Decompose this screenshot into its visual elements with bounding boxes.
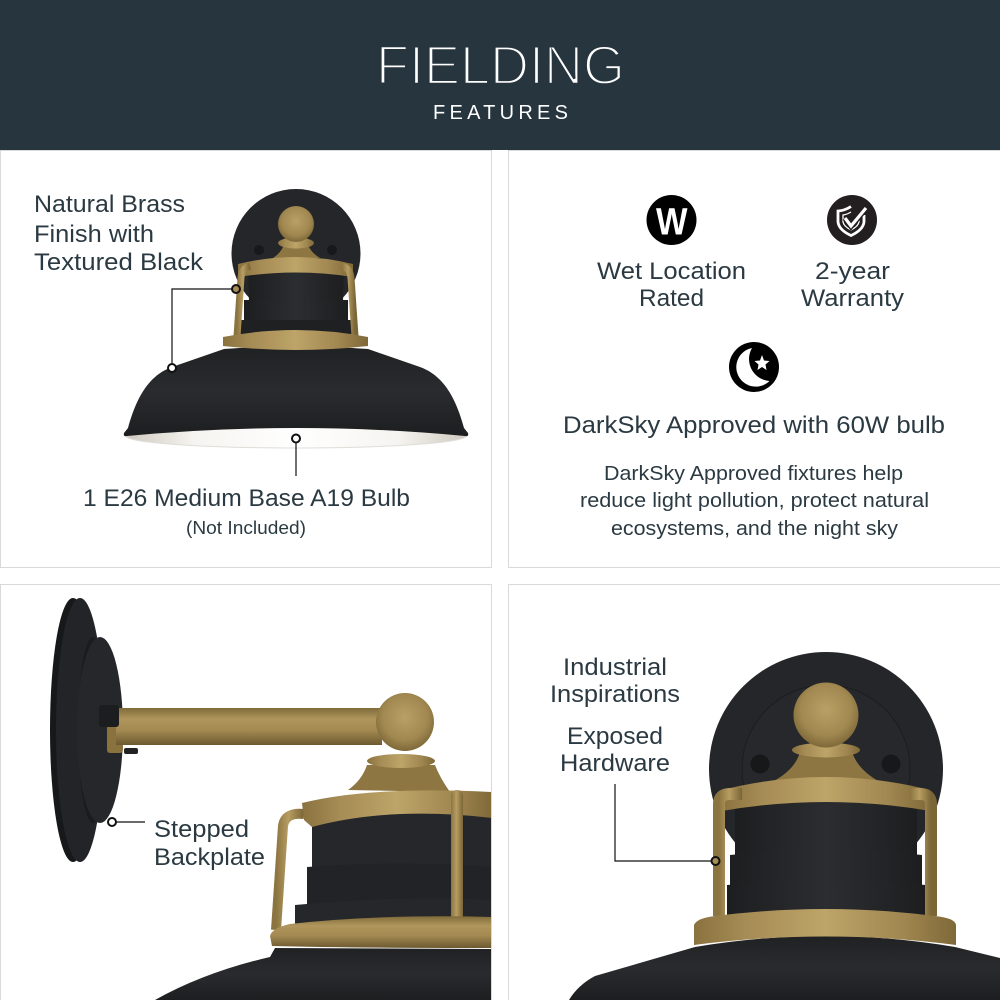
icon: wet location (646, 195, 696, 245)
panel: hardware (508, 584, 1000, 1000)
label: exposed hardware: Hardware (560, 750, 670, 777)
label: exposed hardware: Exposed (567, 723, 663, 750)
label: bulb (83, 485, 410, 538)
label: wet location (597, 258, 746, 312)
icon: dark sky moon (729, 342, 779, 392)
callout: finish leader (168, 285, 240, 372)
label: exposed hardware (560, 723, 670, 777)
label: finish (34, 191, 204, 276)
label: backplate: Stepped (154, 816, 249, 843)
label: warranty: 2-year (815, 258, 890, 285)
callout: backplate leader (108, 818, 145, 826)
label: finish: Natural Brass (34, 191, 185, 218)
label: wet location: Wet Location (597, 258, 746, 285)
panel: ratings (508, 150, 1000, 568)
title: FIELDING (376, 34, 625, 96)
label: industrial inspirations (550, 654, 680, 708)
lamp: full front view (124, 189, 468, 448)
header banner (0, 0, 1000, 150)
label: wet location: Rated (639, 285, 704, 312)
label: backplate (154, 816, 265, 871)
label: industrial inspirations: Industrial (563, 654, 667, 681)
label: bulb: (Not Included) (186, 518, 306, 538)
text block: dark sky description: reduce light pollution, protect natural (580, 489, 929, 512)
text block: dark sky description (580, 462, 929, 540)
subtitle: FEATURES (433, 102, 568, 124)
label: bulb: 1 E26 Medium Base A19 Bulb (83, 485, 410, 512)
icon: wet location: W (656, 202, 688, 244)
lamp: side view (50, 598, 492, 1000)
panel: backplate (0, 584, 492, 1000)
label: backplate: Backplate (154, 844, 265, 871)
callout: hardware leader (615, 784, 720, 865)
text block: dark sky description: ecosystems, and the night sky (611, 517, 899, 540)
label: industrial inspirations: Inspirations (550, 681, 680, 708)
label: finish: Finish with (34, 221, 154, 248)
icon: warranty shield (827, 195, 877, 245)
callout: bulb leader (292, 434, 300, 476)
label: warranty (801, 258, 905, 312)
panel: finish and bulb (0, 150, 492, 568)
text block: dark sky description: DarkSky Approved fixtures help (604, 462, 903, 485)
label: dark sky: DarkSky Approved with 60W bulb (563, 412, 945, 439)
label: warranty: Warranty (801, 285, 905, 312)
label: finish: Textured Black (34, 249, 204, 276)
lamp: close-up view (569, 652, 1000, 1000)
